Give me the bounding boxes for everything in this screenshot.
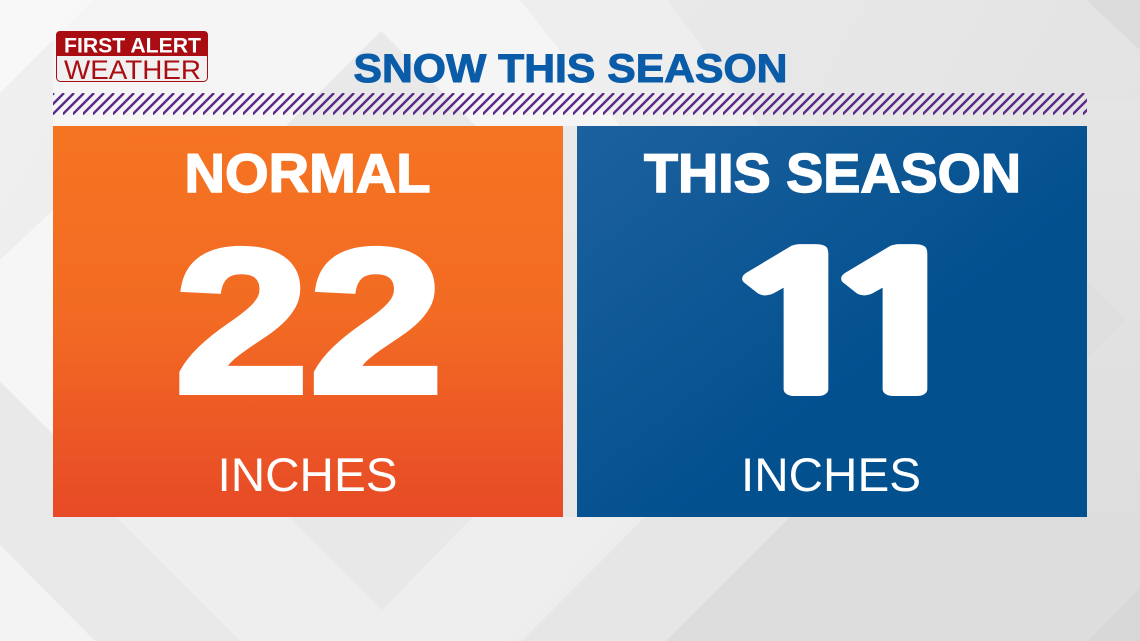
unit: inches: INCHES xyxy=(218,448,398,501)
panel: normal xyxy=(53,126,563,517)
value: 22: 22 xyxy=(174,207,444,436)
logo: First Alert Weather: WEATHER xyxy=(64,55,201,85)
logo: First Alert Weather: FIRST ALERT xyxy=(64,34,201,58)
title: SNOW THIS SEASON xyxy=(354,47,788,91)
hatched purple divider xyxy=(53,93,1087,115)
value: 11: 1 xyxy=(712,234,887,420)
unit: inches: INCHES xyxy=(741,448,921,501)
heading: normal: NORMAL xyxy=(184,142,430,204)
logo: First Alert Weather xyxy=(56,31,208,85)
heading: this season: THIS SEASON xyxy=(644,142,1021,204)
panel: this season xyxy=(577,126,1087,517)
value: 11: 1 xyxy=(811,234,986,420)
value: 11 xyxy=(712,234,986,420)
